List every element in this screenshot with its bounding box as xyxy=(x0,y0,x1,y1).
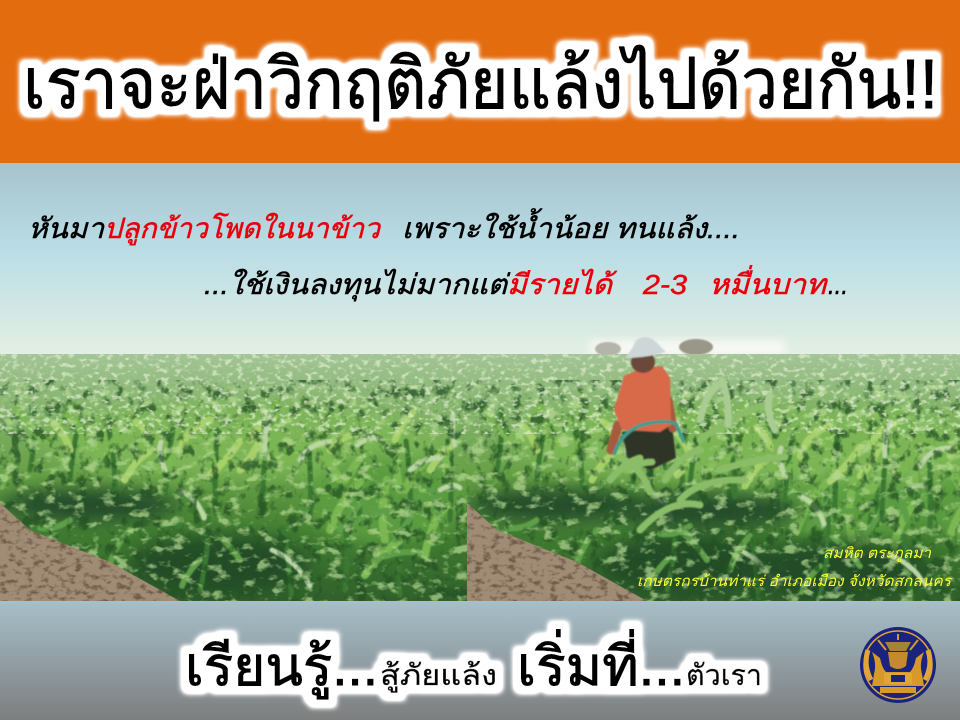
sky haze behind farmer xyxy=(590,340,785,356)
soil strip left xyxy=(0,500,190,601)
soil strip right xyxy=(467,500,657,601)
message line 2 xyxy=(204,265,848,302)
footer panel xyxy=(0,601,960,720)
footer slogan xyxy=(185,629,762,699)
message line 1: หันมา xyxy=(28,213,105,244)
icon: royal emblem seal xyxy=(860,627,936,703)
photo: farmer watering corn field xyxy=(467,337,960,604)
message line 2: มีรายได้ xyxy=(507,268,617,300)
footer slogan: เริ่มที่... xyxy=(517,629,685,697)
sky panel xyxy=(0,163,960,354)
foreground leaves over farmer xyxy=(610,380,785,530)
hat xyxy=(625,337,666,358)
footer slogan: เรียนรู้... xyxy=(185,637,378,699)
farmer xyxy=(611,337,684,470)
message line 2: ...ใช้เงินลงทุนไม่มากแต่ xyxy=(204,268,511,302)
arms xyxy=(611,400,673,450)
footer slogan: สู้ภัยแล้ง xyxy=(380,660,497,693)
distant trees xyxy=(679,339,713,355)
message line 2: 2-3 xyxy=(642,269,687,300)
message line 2: หมื่นบาท xyxy=(709,265,829,300)
message line 1: เพราะใช้น้ำน้อย ทนแล้ง.... xyxy=(402,208,740,244)
farmer caption: เกษตรกรบ้านท่าแร่ อำเภอเมือง จังหวัดสกลนคร xyxy=(637,573,953,590)
farmer caption: สมหิต ตระกูลมา xyxy=(823,545,932,562)
orange title banner xyxy=(0,0,960,163)
message line 1 xyxy=(28,208,740,246)
message line 2: ... xyxy=(828,269,848,300)
leaf texture xyxy=(0,354,467,601)
shirt xyxy=(614,366,671,432)
trousers xyxy=(622,425,676,470)
footer slogan: ตัวเรา xyxy=(686,660,762,692)
farmer caption xyxy=(637,545,953,590)
head xyxy=(631,351,655,373)
photo: corn field xyxy=(0,354,467,601)
message line 1: ปลูกข้าวโพดในนาข้าว xyxy=(104,212,382,246)
hose xyxy=(614,422,684,455)
